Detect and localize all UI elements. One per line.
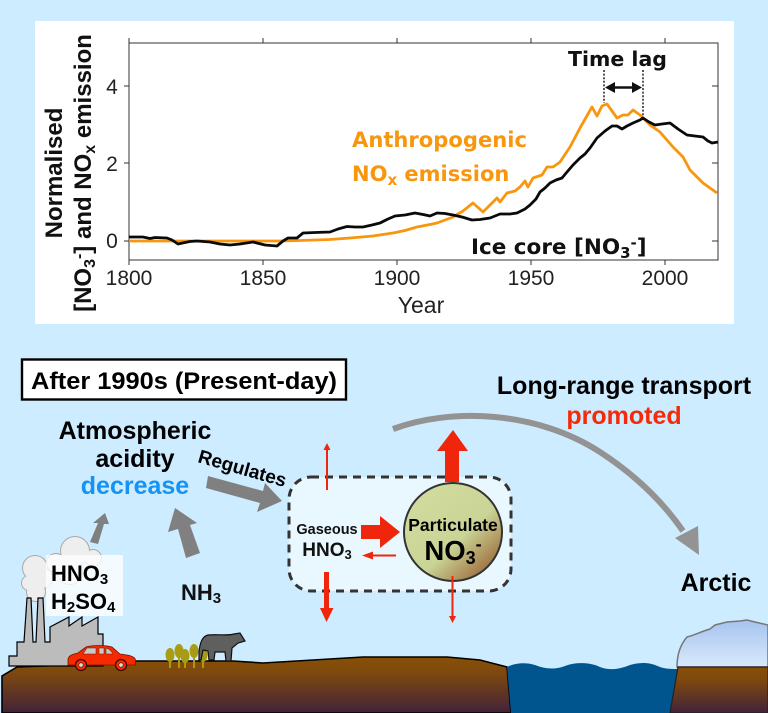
text: gaseous HNO3: HNO <box>302 540 344 561</box>
text: long-range transport promoted: promoted <box>566 402 682 430</box>
ice sheet <box>677 620 768 667</box>
arrow: particulate uplift <box>437 430 468 482</box>
y-axis title: ] and NO <box>70 154 97 254</box>
label: anthropogenic NOx emission: NO <box>352 162 387 186</box>
black line: ice core nitrate <box>129 118 718 246</box>
text: gaseous HNO3: Gaseous <box>296 522 358 538</box>
text: regulates: Regulates <box>196 447 289 492</box>
label: HNO3 and H2SO4: 4 <box>107 599 116 616</box>
text: particulate NO3: NO <box>424 535 466 566</box>
text: atmospheric acidity decrease: Atmospheric <box>59 417 211 445</box>
text: particulate NO3 <box>408 515 498 568</box>
label: HNO3 and H2SO4 <box>46 555 123 616</box>
y-axis title: - <box>71 254 88 259</box>
arrow: particle deposition <box>449 576 456 623</box>
arrow: regulates <box>206 476 282 512</box>
arrow: gas deposition <box>320 572 334 622</box>
arrow: ammonia upward large <box>168 508 200 558</box>
y-axis title: [NO <box>70 268 97 312</box>
text: particulate NO3: Particulate <box>408 515 498 535</box>
icon: car <box>68 646 136 670</box>
x-axis tick labels: 1850 <box>240 267 286 290</box>
label: HNO3 and H2SO4: 3 <box>100 571 108 588</box>
title box: After 1990s (Present-day) <box>31 368 337 395</box>
y-axis title: emission <box>70 34 97 145</box>
x-axis tick labels <box>106 267 688 290</box>
icon: crops <box>166 644 208 668</box>
arrow: emissions upward small <box>90 513 109 544</box>
label: anthropogenic NOx emission <box>352 128 527 189</box>
text: particulate NO3: 3 <box>466 548 476 568</box>
label: HNO3 and H2SO4: SO <box>75 589 107 614</box>
text: atmospheric acidity decrease <box>59 417 211 500</box>
y-axis title: 3 <box>82 259 99 268</box>
x-axis title: Year <box>398 292 445 318</box>
label: HNO3 and H2SO4: 2 <box>67 599 75 616</box>
orange line: NOx emission <box>129 104 717 241</box>
title box <box>22 360 346 400</box>
icon: cow <box>199 633 245 661</box>
label: HNO3 and H2SO4: HNO <box>51 561 100 586</box>
x-axis tick labels: 2000 <box>642 267 688 290</box>
y-axis tick labels: 2 <box>106 153 118 176</box>
y-axis tick labels: 4 <box>106 76 118 99</box>
text: long-range transport promoted <box>497 372 752 430</box>
chart axes <box>124 38 718 265</box>
icon: smoke clouds <box>22 537 101 601</box>
text: gaseous HNO3: 3 <box>344 547 352 562</box>
x-axis tick labels: 1950 <box>508 267 554 290</box>
x-axis tick labels: 1800 <box>106 267 152 290</box>
label: ice core nitrate: 3 <box>620 244 631 262</box>
ground: left land <box>2 657 511 713</box>
time lag marker <box>604 70 643 117</box>
water <box>507 663 678 713</box>
panel: line chart <box>35 21 734 324</box>
label: ice core nitrate: - <box>631 234 637 252</box>
label: ice core nitrate: Ice core [NO <box>471 235 620 260</box>
icon: factory <box>9 598 103 666</box>
x-axis tick labels: 1900 <box>374 267 420 290</box>
text: atmospheric acidity decrease: decrease <box>81 472 189 500</box>
arrow: gas to particle <box>361 516 400 548</box>
y-axis title: x <box>82 145 99 154</box>
label: anthropogenic NOx emission: emission <box>397 162 509 186</box>
y-axis title: Normalised <box>41 108 68 238</box>
y-axis tick labels: 0 <box>106 230 118 253</box>
box: gas-particle partitioning <box>289 477 511 591</box>
text: NH3: NH <box>181 580 213 605</box>
arrow: gas uplift <box>324 443 330 490</box>
label: ice core nitrate: ] <box>637 235 647 260</box>
label: time lag: Time lag <box>568 47 667 71</box>
text: long-range transport promoted: Long-range transport <box>497 372 752 400</box>
ground: arctic land <box>670 667 768 713</box>
arrow: particle to gas <box>362 552 396 560</box>
label: anthropogenic NOx emission: Anthropogenic <box>352 128 527 152</box>
text: atmospheric acidity decrease: acidity <box>95 445 175 473</box>
particle circle <box>404 483 502 581</box>
label: anthropogenic NOx emission: x <box>387 171 397 189</box>
y-axis title <box>41 34 99 312</box>
arrow: long-range transport <box>393 416 699 555</box>
text: NH3: 3 <box>213 590 221 607</box>
text: gaseous HNO3 <box>296 522 358 562</box>
text: arctic: Arctic <box>681 569 752 597</box>
text: particulate NO3: - <box>476 534 482 554</box>
y-axis tick labels <box>106 76 118 253</box>
label: HNO3 and H2SO4: H <box>51 589 67 614</box>
